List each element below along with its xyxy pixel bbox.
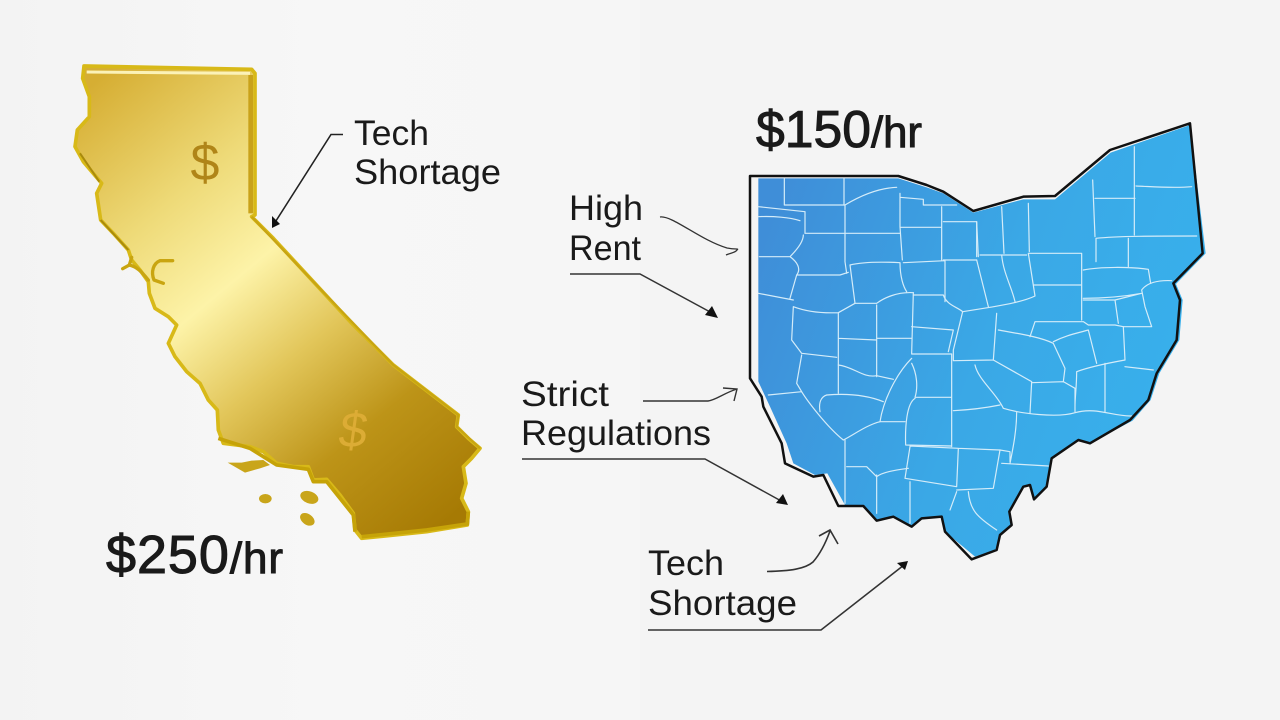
label: Tech Shortage California xyxy=(354,114,501,192)
label: High Rent xyxy=(569,189,643,268)
label: High Rent: Rent xyxy=(569,229,641,268)
Channel Islands xyxy=(228,460,320,528)
panel: California map xyxy=(75,66,480,538)
label: Strict Regulations: Regulations xyxy=(521,414,711,453)
panel: Ohio map xyxy=(750,123,1206,559)
arrow: High Rent underline xyxy=(570,274,718,318)
price: Ohio: $150/hr xyxy=(756,101,922,159)
label: Strict Regulations xyxy=(521,375,711,453)
Ohio black outline xyxy=(750,123,1203,559)
label: Tech Shortage California: Shortage xyxy=(354,153,501,192)
Ohio fill xyxy=(758,125,1206,557)
label: Tech Shortage California: Tech xyxy=(354,114,429,153)
California state shape xyxy=(75,66,480,538)
label: Strict Regulations: Strict xyxy=(521,375,609,414)
arrow: Regulations underline xyxy=(522,459,788,505)
label: Tech Shortage Ohio: Shortage xyxy=(648,584,797,623)
county lines xyxy=(758,147,1197,530)
arrow: California tech shortage xyxy=(272,134,343,228)
icon: dollar sign south: $ xyxy=(336,402,371,458)
San Francisco bay inlets xyxy=(123,257,173,283)
arrow: High Rent curved xyxy=(660,217,738,255)
label: Tech Shortage Ohio xyxy=(648,544,797,623)
price: California: $250/hr xyxy=(106,525,283,585)
label: Tech Shortage Ohio: Tech xyxy=(648,544,724,583)
arrow: Strict curved xyxy=(643,388,737,401)
arrow: Tech curved xyxy=(767,530,838,572)
arrow: Shortage underline xyxy=(648,561,908,630)
icon: dollar sign north: $ xyxy=(191,134,220,192)
label: High Rent: High xyxy=(569,189,643,228)
